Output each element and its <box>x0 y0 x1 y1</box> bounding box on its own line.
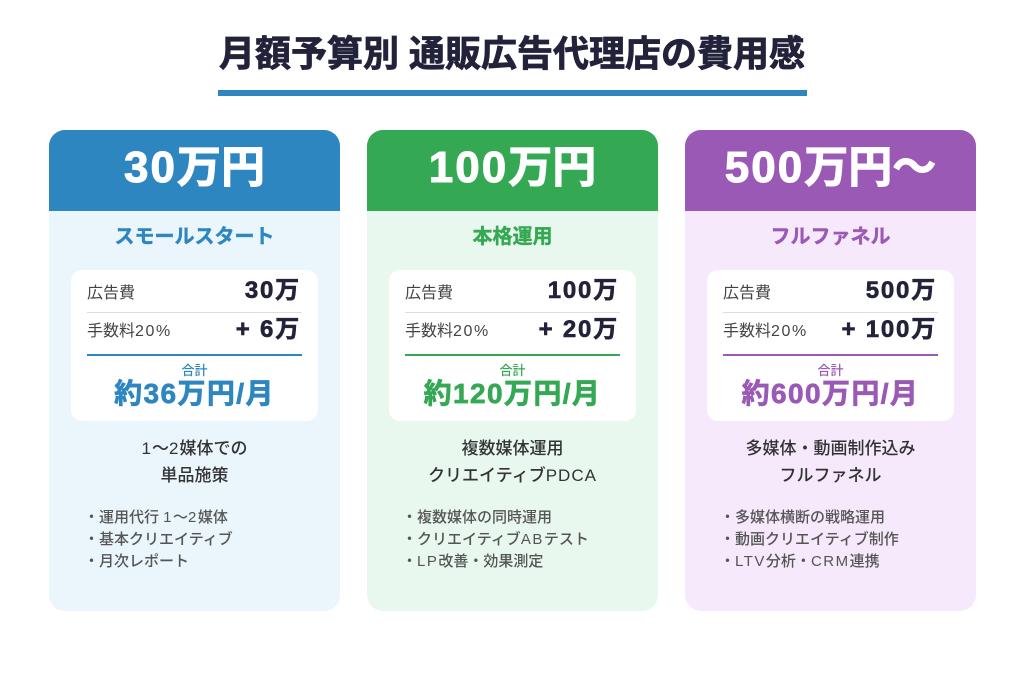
feature list: ・月次レポート <box>84 553 189 570</box>
feature list: ・LTV分析・CRM連携 <box>720 553 880 570</box>
description <box>746 439 916 485</box>
fee label: 手数料20% <box>405 323 490 340</box>
ad cost label: 広告費 <box>405 285 453 302</box>
plan name: スモールスタート <box>114 226 274 248</box>
title: 月額予算別 通販広告代理店の費用感 <box>219 33 805 74</box>
fee value: + 20万 <box>539 316 619 343</box>
fee label: 手数料20% <box>87 323 172 340</box>
feature list: ・動画クリエイティブ制作 <box>720 531 899 548</box>
total label: 合計 <box>499 363 526 378</box>
price header: 500万円〜 <box>725 143 936 192</box>
description: 多媒体・動画制作込み <box>746 439 916 458</box>
feature list: ・複数媒体の同時運用 <box>402 509 552 526</box>
price header: 100万円 <box>429 143 596 192</box>
cost breakdown box <box>71 270 318 421</box>
feature list <box>84 509 233 570</box>
panel: 30万円 plan <box>49 130 340 611</box>
feature list: ・運用代行 1〜2媒体 <box>84 509 228 526</box>
fee label: 手数料20% <box>723 323 808 340</box>
description: フルファネル <box>780 466 882 485</box>
description: クリエイティブPDCA <box>428 466 597 485</box>
fee value: + 100万 <box>841 316 937 343</box>
ad cost value: 30万 <box>245 277 301 304</box>
cost breakdown box <box>707 270 954 421</box>
total value: 約120万円/月 <box>424 378 601 409</box>
description: 1〜2媒体での <box>142 439 247 458</box>
description: 単品施策 <box>160 466 228 485</box>
cost breakdown box <box>389 270 636 421</box>
price header: 30万円 <box>124 143 265 192</box>
feature list: ・LP改善・効果測定 <box>402 553 543 570</box>
feature list: ・クリエイティブABテスト <box>402 531 589 548</box>
price header <box>685 130 976 211</box>
feature list <box>720 509 899 570</box>
feature list <box>402 509 589 570</box>
plan name: フルファネル <box>770 226 890 248</box>
feature list: ・基本クリエイティブ <box>84 531 233 548</box>
description <box>428 439 597 485</box>
total label: 合計 <box>817 363 844 378</box>
total label: 合計 <box>181 363 208 378</box>
feature list: ・多媒体横断の戦略運用 <box>720 509 885 526</box>
ad cost label: 広告費 <box>723 285 771 302</box>
total value: 約600万円/月 <box>742 378 919 409</box>
panel: 500万円〜 plan <box>685 130 976 611</box>
price header <box>49 130 340 211</box>
fee value: + 6万 <box>236 316 301 343</box>
title underline <box>218 90 807 96</box>
plan name: 本格運用 <box>472 226 552 248</box>
total value: 約36万円/月 <box>114 378 275 409</box>
price header <box>367 130 658 211</box>
description <box>142 439 247 485</box>
ad cost value: 100万 <box>548 277 619 304</box>
ad cost label: 広告費 <box>87 285 135 302</box>
panel: 100万円 plan <box>367 130 658 611</box>
description: 複数媒体運用 <box>462 439 564 458</box>
ad cost value: 500万 <box>866 277 937 304</box>
